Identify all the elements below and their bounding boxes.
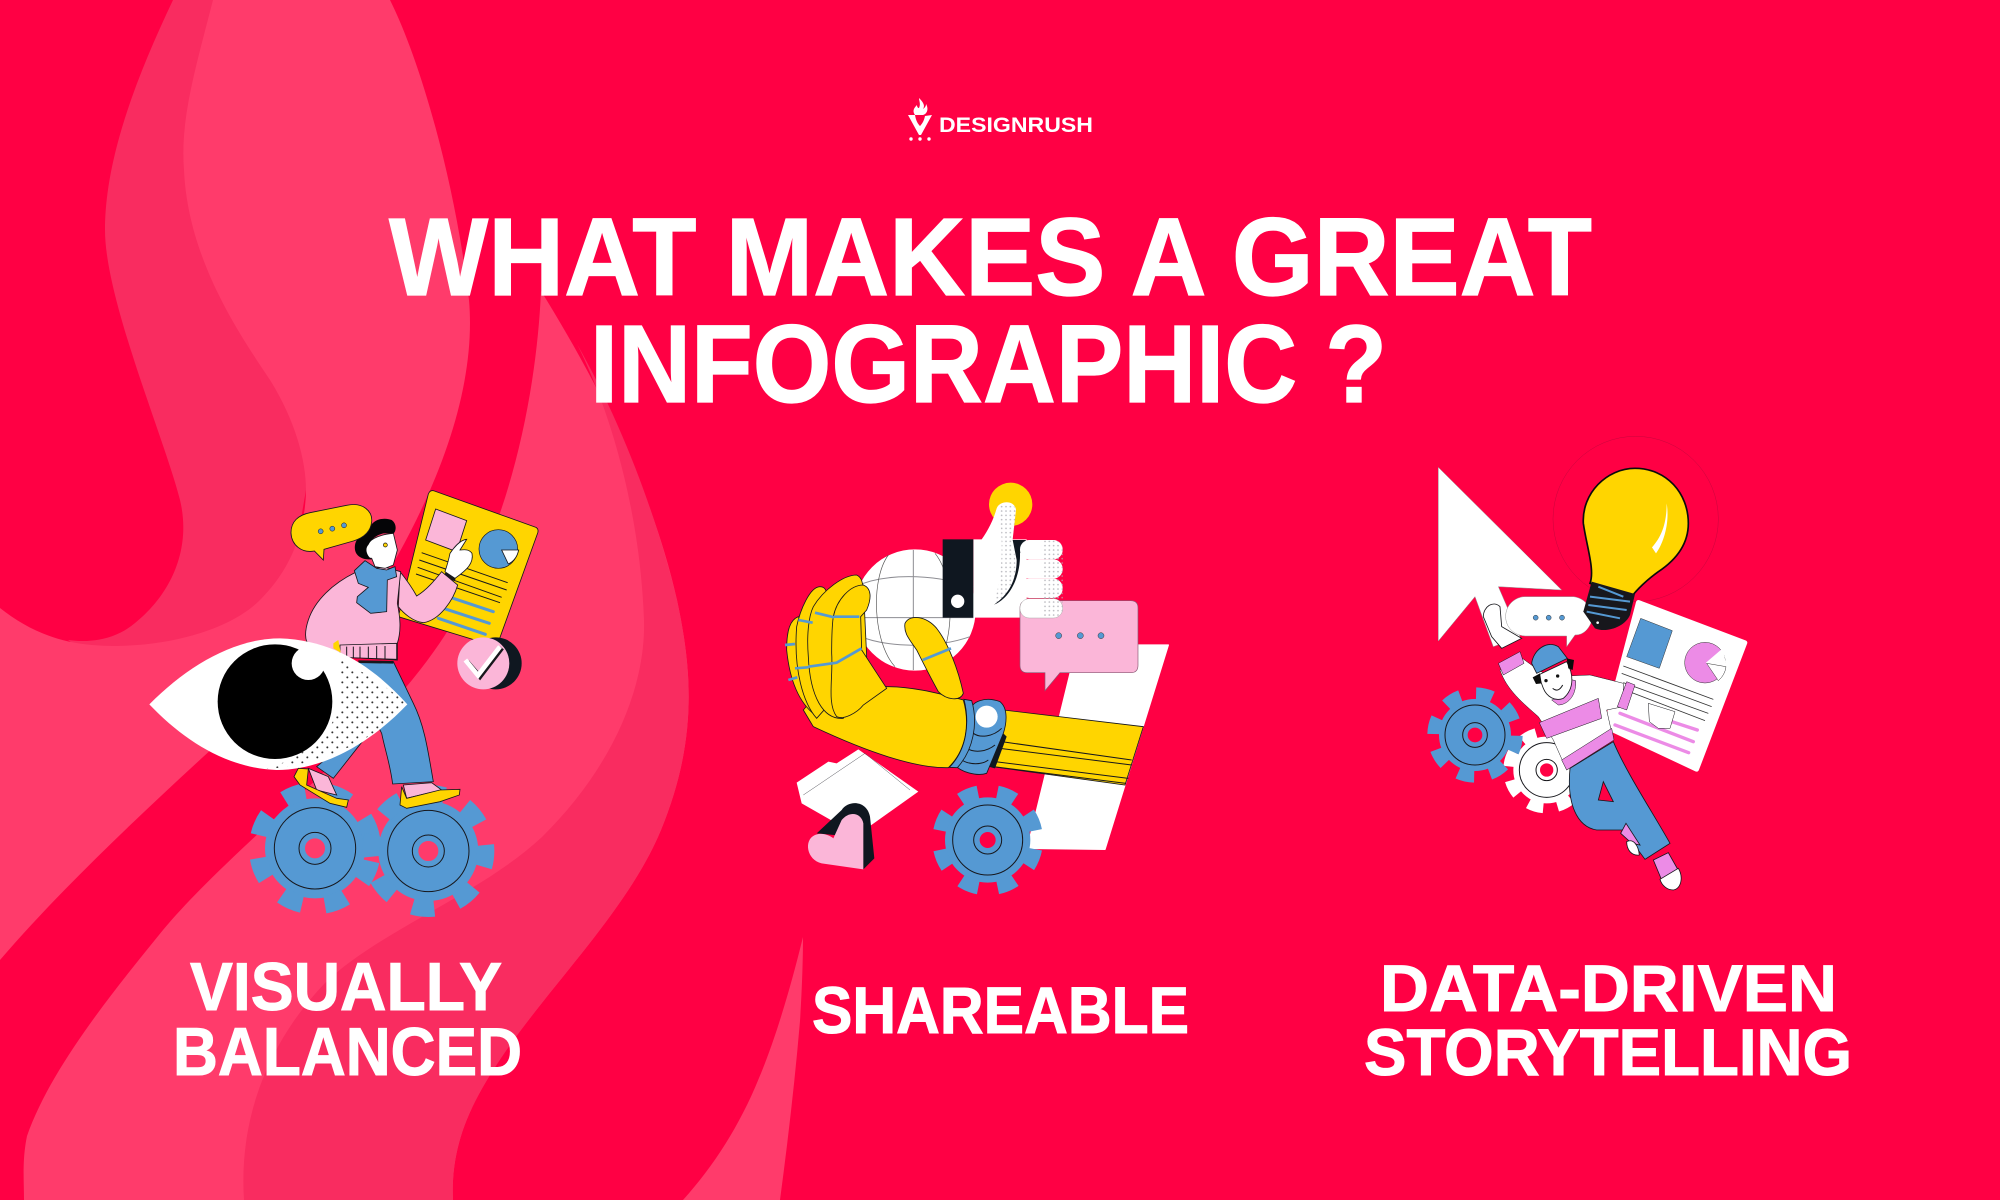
check badge (457, 637, 522, 689)
label: data-driven storytelling: DATA-DRIVEN (1380, 951, 1837, 1025)
robot wrist (955, 699, 1006, 774)
heart (808, 803, 874, 869)
yellow document (398, 491, 538, 647)
wordmark: DESIGNRUSH (939, 113, 1093, 137)
character (1483, 604, 1681, 890)
title (389, 196, 1592, 426)
jeans (1569, 742, 1670, 859)
white panel (1027, 645, 1168, 849)
character head (355, 519, 397, 568)
character jeans (317, 662, 433, 784)
illustration: shareable (785, 483, 1168, 897)
character sweater (306, 567, 458, 662)
eye (149, 638, 407, 770)
speech bubble (1506, 597, 1592, 647)
logo: DesignRush (908, 98, 1093, 141)
cursor arrow (1438, 467, 1562, 647)
title: INFOGRAPHIC ? (590, 303, 1387, 426)
gear left (246, 780, 384, 917)
illustration: data-driven storytelling (1433, 436, 1745, 890)
hand on document (1648, 703, 1675, 728)
thumbs up (943, 483, 1032, 618)
sweater stripes (1498, 652, 1635, 770)
character scarf (354, 561, 397, 613)
robot hand (785, 575, 975, 768)
sweater (1500, 657, 1623, 770)
label: shareable: SHAREABLE (812, 973, 1189, 1047)
icon: flame and V (908, 98, 932, 141)
raised hand (1483, 604, 1522, 648)
bulb glow ring (1553, 436, 1718, 602)
fingers of thumbs up (1020, 540, 1063, 618)
white document (1606, 602, 1745, 769)
globe (854, 549, 976, 671)
shoes (294, 768, 460, 808)
label: data-driven storytelling: STORYTELLING (1364, 1015, 1852, 1089)
robot arm (988, 710, 1143, 785)
label: visually balanced: VISUALLY (190, 949, 502, 1025)
illustration: visually balanced (149, 491, 538, 917)
pink speech bubble (1020, 601, 1138, 691)
light bulb (1583, 468, 1688, 630)
label: data-driven storytelling (1364, 951, 1852, 1089)
label: visually balanced: BALANCED (173, 1014, 522, 1090)
blue gear (1433, 693, 1517, 777)
folder (797, 749, 918, 828)
head (1532, 645, 1574, 699)
gear right (365, 788, 491, 914)
gear (931, 783, 1045, 897)
white gear (1506, 729, 1587, 811)
label: visually balanced (173, 949, 522, 1090)
yellow speech bubble (291, 505, 372, 560)
flame background shapes (0, 0, 803, 1200)
shoes (1621, 823, 1681, 890)
gears (246, 780, 491, 917)
title: WHAT MAKES A GREAT (389, 196, 1592, 319)
character hand (445, 539, 472, 580)
